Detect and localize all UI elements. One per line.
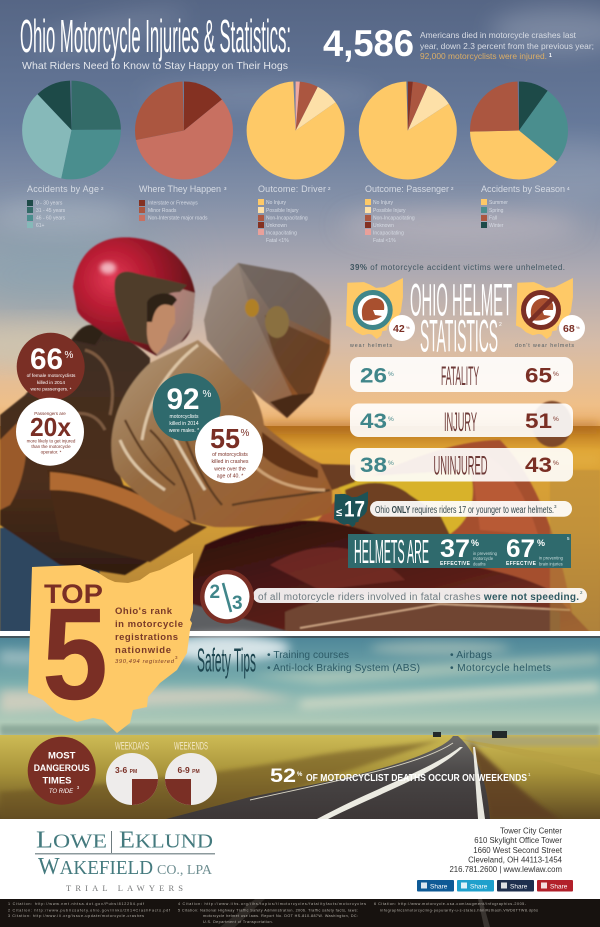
logo: Lowe Eklund Wakefield	[35, 828, 215, 893]
legend: accidents by age	[27, 184, 104, 229]
legend: accidents by season: Accidents by Season	[481, 184, 565, 194]
logo: Lowe Eklund Wakefield: TRIAL LAWYERS	[66, 883, 183, 893]
pie chart: accidents by season	[494, 106, 544, 155]
helmet opening padding	[114, 272, 187, 345]
clock: weekdays 3-6 pm: 3-6 PM	[115, 765, 137, 775]
clock: weekends 6-9 pm	[165, 740, 217, 805]
list: safety tips: • Anti-lock Braking System (ABS)	[267, 663, 420, 674]
legend: where they happen: Non-Interstate major roads	[148, 216, 208, 222]
text: 52 percent of deaths occur on weekends: 52	[270, 766, 296, 787]
panel: fatality comparison: 26	[360, 364, 387, 388]
rider jeans	[0, 525, 100, 632]
callout: two thirds not speeding: 2	[580, 590, 583, 595]
red helmet	[73, 237, 195, 356]
callout: 92 percent were males: motorcyclists	[170, 414, 199, 420]
heading: Ohio helmet statistics: 2	[499, 322, 502, 328]
headline statistic: 4,586 deaths: Americans died in motorcycle crashes last	[420, 30, 577, 40]
share buttons: Share	[510, 884, 528, 890]
list: safety tips: • Training courses	[267, 650, 349, 661]
legend: outcome passenger: 2	[451, 186, 454, 191]
citations strip: infographics/motorcycling-popularity-u-s-states.html#sthash.VWD6TTW8.dpbs	[380, 908, 538, 912]
callout: 66 percent of female motorcyclists: were passengers. *	[30, 386, 72, 392]
callout: two thirds not speeding: 2	[210, 582, 220, 603]
legend: outcome driver: Unknown	[266, 223, 287, 229]
citations strip: motorcycle helmet use laws. Report No. DOT HS-810-887W. Washington, DC:	[203, 914, 358, 918]
panel: top 5 Ohio map: Ohio's rank	[115, 606, 173, 617]
share buttons: Share	[430, 884, 448, 890]
legend: accidents by age: 0 - 30 years	[36, 200, 63, 206]
legend: accidents by age: 31 - 45 years	[36, 208, 66, 214]
legend: outcome driver: Outcome: Driver	[258, 184, 326, 194]
legend: accidents by age: 46 - 60 years	[36, 216, 66, 222]
callout: 92 percent were males: killed in 2014	[169, 421, 199, 427]
panel: helmets are effective: %	[471, 538, 479, 548]
panel: top 5 Ohio map: 390,494 registered	[115, 659, 175, 665]
callout: 92 percent were males	[153, 373, 221, 441]
legend: outcome passenger: No Injury	[373, 200, 394, 206]
headline statistic: 4,586 deaths: 1	[549, 53, 552, 59]
panel: uninjured comparison: %	[553, 460, 559, 467]
legend: accidents by season: Spring	[489, 208, 504, 214]
panel: helmets are effective: 5	[567, 536, 570, 541]
callout: 66 percent of female motorcyclists: 66	[30, 343, 63, 376]
legend: outcome passenger	[365, 184, 454, 244]
pie chart: outcome passenger	[383, 106, 432, 155]
legend: outcome driver: Fatal <1%	[266, 238, 289, 244]
legend: where they happen: Where They Happen	[139, 184, 221, 194]
legend: accidents by age: 2	[101, 186, 104, 191]
panel: injury comparison: 51	[525, 410, 552, 433]
callout: two thirds not speeding: 3	[232, 593, 243, 614]
panel: fatality comparison: FATALITY	[441, 361, 479, 391]
panel: helmets are effective: 67	[506, 535, 535, 563]
panel: top 5 Ohio map: 5	[42, 580, 108, 727]
legend: outcome passenger: Outcome: Passenger	[365, 184, 449, 194]
icon: Ohio with helmet, wear helmets 42 percent: 42	[393, 323, 405, 335]
panel: injury comparison: 43	[360, 410, 387, 433]
callout: passengers 20x more likely: 20x	[30, 412, 72, 442]
icon: Ohio with crossed helmet, no helmets 68 percent: %	[576, 325, 580, 330]
legend: accidents by season: Winter	[489, 223, 504, 229]
callout: 66 percent of female motorcyclists: of female motorcyclists	[27, 373, 76, 379]
text: 52 percent of deaths occur on weekends	[270, 766, 531, 787]
citations strip: 6 Citation: http://www.motorcycle-usa.com/augment/infographics-2005-	[374, 902, 527, 906]
panel: helmets are effective: deaths	[473, 562, 486, 566]
legend: accidents by age: Accidents by Age	[27, 184, 99, 194]
panel: fatality comparison: 65	[525, 364, 552, 388]
callout: most dangerous times to ride: 3	[77, 785, 80, 790]
list: safety tips: • Motorcycle helmets	[450, 663, 551, 674]
callout: 55 percent over 40: were over the	[214, 466, 246, 472]
pie chart: outcome driver	[271, 106, 320, 155]
woman jacket	[0, 329, 150, 575]
headline statistic: 4,586 deaths: year, down 2.3 percent from the previous year;	[420, 41, 594, 51]
headline statistic: 4,586 deaths: 4,586	[323, 23, 414, 64]
woman face	[147, 296, 175, 354]
callout: 66 percent of female motorcyclists: %	[65, 350, 74, 361]
footer panel	[0, 819, 600, 899]
clock: weekdays 3-6 pm	[106, 740, 158, 805]
callout: most dangerous times to ride: TIMES	[42, 776, 72, 786]
legend: outcome driver: Possible Injury	[266, 208, 299, 214]
citations strip: 5 Citation: National Highway Traffic Safety Administration. 2006. Traffic safety facts, laws:	[178, 908, 358, 912]
callout: Ohio only requires riders 17 or younger: 17	[344, 496, 365, 522]
text: firm address	[449, 826, 563, 874]
callout: passengers 20x more likely: more likely to get injured	[27, 438, 76, 444]
panel: uninjured comparison: UNINJURED	[434, 450, 488, 480]
text: firm address: 610 Skylight Office Tower	[474, 836, 562, 845]
text: 52 percent of deaths occur on weekends: OF MOTORCYCLIST DEATHS OCCUR ON WEEKENDS	[306, 773, 527, 784]
legend: outcome passenger: Incapacitating	[373, 230, 404, 236]
callout: 55 percent over 40	[195, 415, 263, 483]
background: sky and field photo	[0, 0, 600, 632]
panel: helmets are effective: %	[537, 538, 545, 548]
citations strip: 3 Citation: http://www.iii.org/issue-update/motorcycle-crashes	[8, 914, 144, 918]
legend: outcome driver: Incapacitating	[266, 230, 297, 236]
legend: where they happen: Interstate or Freeways	[148, 200, 198, 206]
callout: 55 percent over 40: killed in crashes	[212, 459, 249, 465]
share buttons: Share	[470, 884, 488, 890]
mirror	[532, 401, 572, 447]
legend: outcome passenger: Non-Incapacitating	[373, 216, 415, 222]
legend: outcome passenger: Unknown	[373, 223, 394, 229]
panel: injury comparison: INJURY	[444, 407, 477, 437]
callout: 55 percent over 40: 55	[210, 423, 240, 454]
text: firm address: 216.781.2600 | www.lewlaw.com	[449, 865, 562, 874]
photo: riders and motorcycle	[0, 237, 600, 632]
callout: passengers 20x more likely: than the motorcycle	[31, 444, 71, 449]
icon: Ohio with helmet, wear helmets 42 percent: wear helmets	[350, 343, 392, 349]
text: 39 percent unhelmeted: 39% of motorcycle accident victims were unhelmeted.	[350, 263, 565, 272]
title: What Riders Need to Know to Stay Happy on Their Hogs	[22, 60, 288, 72]
legend: outcome passenger: Fatal <1%	[373, 238, 396, 244]
callout: Ohio only requires riders 17 or younger: 3	[554, 504, 557, 509]
legend: outcome driver: Non-Incapacitating	[266, 216, 308, 222]
panel: top 5 Ohio map: in motorcycle	[115, 619, 183, 630]
motorcycle fairing	[170, 440, 600, 632]
headline statistic: 4,586 deaths: 92,000 motorcyclists were injured.	[420, 51, 547, 61]
clock: weekdays 3-6 pm: WEEKDAYS	[115, 740, 149, 752]
logo: Lowe Eklund Wakefield: LOWE	[36, 828, 107, 854]
callout: 66 percent of female motorcyclists: killed in 2014	[37, 380, 65, 386]
text: 52 percent of deaths occur on weekends: 1	[528, 772, 531, 777]
pie chart: accidents by age	[47, 105, 96, 155]
panel: uninjured comparison: 38	[360, 454, 387, 477]
icon: Ohio with crossed helmet, no helmets 68 percent: don't wear helmets	[515, 343, 574, 349]
text: Safety Tips	[197, 642, 256, 678]
icon: Ohio with crossed helmet, no helmets 68 percent	[515, 278, 585, 349]
panel: helmets are effective: in preventing	[539, 556, 564, 560]
list: safety tips	[267, 650, 551, 674]
callout: most dangerous times to ride: DANGEROUS	[34, 763, 90, 774]
citations strip: 4 Citation: http://www.iihs.org/iihs/topics/t/motorcycles/fatalityfacts/motorcycles	[178, 902, 366, 906]
panel: helmets are effective: 37	[440, 535, 470, 563]
panel: uninjured comparison	[350, 448, 573, 482]
share buttons	[417, 880, 573, 892]
panel: uninjured comparison: 43	[525, 454, 552, 477]
callout: two thirds not speeding	[200, 570, 587, 624]
silver helmet	[204, 263, 331, 418]
callout: most dangerous times to ride: MOST	[48, 750, 76, 762]
legend: accidents by season: Summer	[489, 200, 508, 206]
panel: fatality comparison: %	[553, 371, 559, 378]
man jacket	[111, 340, 332, 527]
callout: 55 percent over 40: %	[241, 428, 250, 439]
callout: 92 percent were males: 92	[166, 383, 200, 416]
divider band between photos	[0, 631, 600, 638]
callout: 55 percent over 40: of motorcyclists	[212, 452, 248, 458]
logo: Lowe Eklund Wakefield: EKLUND	[119, 828, 213, 854]
text: firm address: Cleveland, OH 44113-1454	[468, 856, 563, 864]
legend: accidents by season: Fall	[489, 216, 497, 222]
pie chart: where they happen	[160, 106, 208, 155]
panel: injury comparison: %	[553, 416, 559, 423]
legend: outcome driver: 2	[328, 186, 331, 191]
text: 52 percent of deaths occur on weekends: %	[297, 772, 303, 778]
legend: accidents by age: 61+	[36, 223, 45, 229]
logo: Lowe Eklund Wakefield: CO., LPA	[157, 863, 213, 878]
panel: uninjured comparison: %	[388, 460, 394, 467]
callout: Ohio only requires riders 17 or younger	[334, 492, 572, 527]
icon: Ohio with helmet, wear helmets 42 percent	[346, 278, 415, 349]
legend: outcome driver	[258, 184, 331, 244]
panel: top 5 Ohio map: registrations	[115, 632, 178, 643]
panel: injury comparison: %	[388, 416, 394, 423]
road	[166, 731, 507, 819]
list: safety tips: • Airbags	[450, 650, 492, 661]
text: firm address: Tower City Center	[500, 826, 562, 836]
callout: passengers 20x more likely: Passengers are	[34, 411, 66, 416]
legend: outcome passenger: Possible Injury	[373, 208, 406, 214]
legend: where they happen	[139, 184, 227, 222]
visor	[150, 282, 195, 356]
legend: accidents by season	[481, 184, 570, 229]
legend: where they happen: Minor Roads	[148, 208, 177, 214]
headline statistic: 4,586 deaths	[323, 23, 594, 64]
callout: passengers 20x more likely: operator. *	[41, 450, 62, 454]
icon: Ohio with crossed helmet, no helmets 68 percent: 68	[563, 323, 575, 335]
panel: top 5 Ohio map: nationwide	[115, 645, 171, 656]
citations strip: 1 Citation: http://www.nmt.nhtsa.dot.gov/Pubs/812254.pdf	[8, 902, 145, 906]
panel: helmets are effective: in preventing	[473, 551, 498, 556]
citations strip: 2 Citation: http://www.publicsafety.ohio.gov/links/2014CrashFacts.pdf	[8, 908, 171, 912]
icon: Ohio with helmet, wear helmets 42 percent: %	[406, 325, 410, 330]
citations strip	[0, 899, 600, 927]
clock: weekends 6-9 pm: WEEKENDS	[174, 740, 208, 752]
background: road photo	[0, 635, 600, 819]
text: firm address: 1660 West Second Street	[473, 846, 563, 855]
panel: fatality comparison	[350, 357, 573, 392]
callout: Ohio only requires riders 17 or younger: ≤	[336, 507, 342, 519]
panel: fatality comparison: %	[388, 371, 394, 378]
panel: helmets are effective: HELMETS ARE	[354, 533, 429, 570]
callout: 55 percent over 40: age of 40. *	[217, 474, 243, 480]
title	[20, 10, 291, 72]
woman hair	[72, 325, 105, 345]
callout: two thirds not speeding: of all motorcycle riders involved in fatal crashes were not speeding.	[258, 592, 579, 603]
callout: most dangerous times to ride	[28, 737, 96, 805]
legend: outcome driver: No Injury	[266, 200, 287, 206]
callout: 92 percent were males: were males. *	[169, 428, 199, 434]
clock: weekends 6-9 pm: 6-9 PM	[178, 765, 200, 775]
callout: most dangerous times to ride: TO RIDE	[49, 789, 74, 795]
panel: injury comparison	[350, 404, 573, 437]
share buttons: Share	[550, 884, 568, 890]
callout: passengers 20x more likely	[16, 398, 84, 466]
panel: helmets are effective: brain injuries	[539, 562, 563, 566]
panel: top 5 Ohio map	[28, 553, 193, 733]
panel: helmets are effective: EFFECTIVE	[506, 561, 537, 567]
panel: helmets are effective: motorcycle	[473, 556, 494, 561]
legend: accidents by season: 4	[567, 186, 570, 191]
callout: 66 percent of female motorcyclists	[17, 333, 85, 401]
heading: Ohio helmet statistics	[410, 274, 512, 362]
legend: where they happen: 3	[224, 186, 227, 191]
panel: helmets are effective: EFFECTIVE	[440, 561, 471, 567]
panel: top 5 Ohio map: TOP	[44, 579, 103, 609]
logo: Lowe Eklund Wakefield: WAKEFIELD	[38, 854, 153, 880]
panel: top 5 Ohio map: 3	[175, 655, 178, 660]
callout: 92 percent were males: %	[203, 389, 212, 400]
citations strip: U.S. Department of Transportation.	[203, 920, 273, 924]
